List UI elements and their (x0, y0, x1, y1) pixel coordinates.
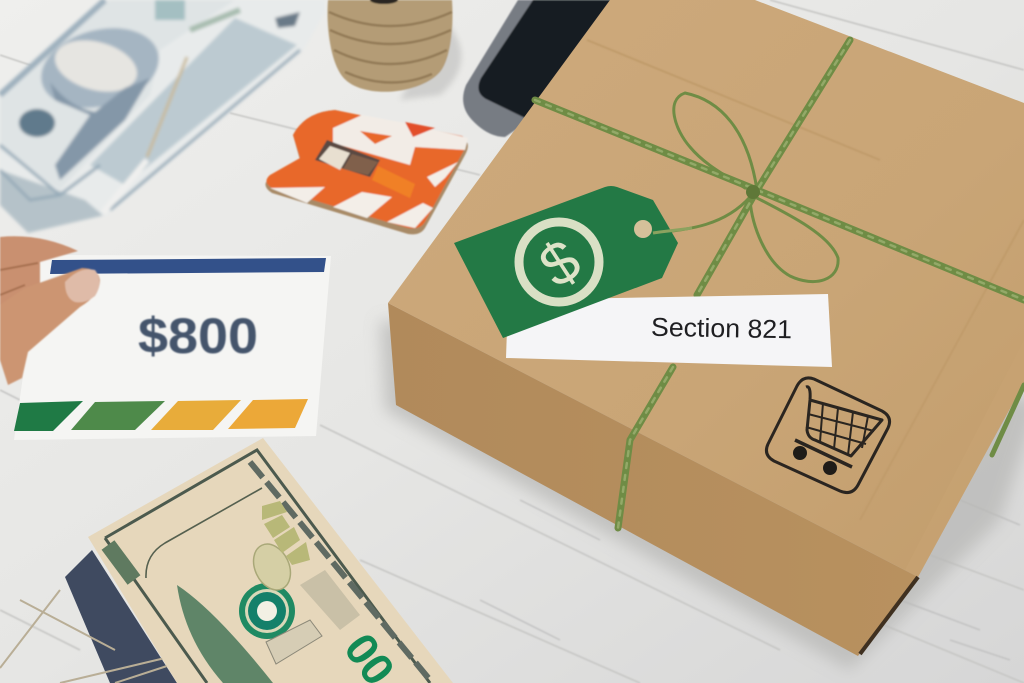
twine on box (535, 40, 1024, 528)
seal (239, 583, 295, 639)
green price tag (454, 186, 692, 338)
icon: shopping cart (766, 378, 890, 493)
banknotes top left (0, 0, 325, 233)
white label: Section 821: Section 821 (651, 312, 792, 344)
twine spool (328, 0, 461, 100)
$800 amount: $800 (138, 308, 258, 364)
cardboard box (388, 0, 1024, 656)
phone (463, 0, 620, 137)
box shadow (380, 320, 1024, 670)
banknote bottom (0, 438, 453, 683)
hand (0, 236, 100, 385)
dollar icon: $ (528, 226, 592, 300)
rope and dark book (0, 550, 177, 683)
card: $800 (14, 255, 331, 440)
white label: Section 821 (506, 294, 832, 367)
orange coaster (265, 110, 468, 234)
